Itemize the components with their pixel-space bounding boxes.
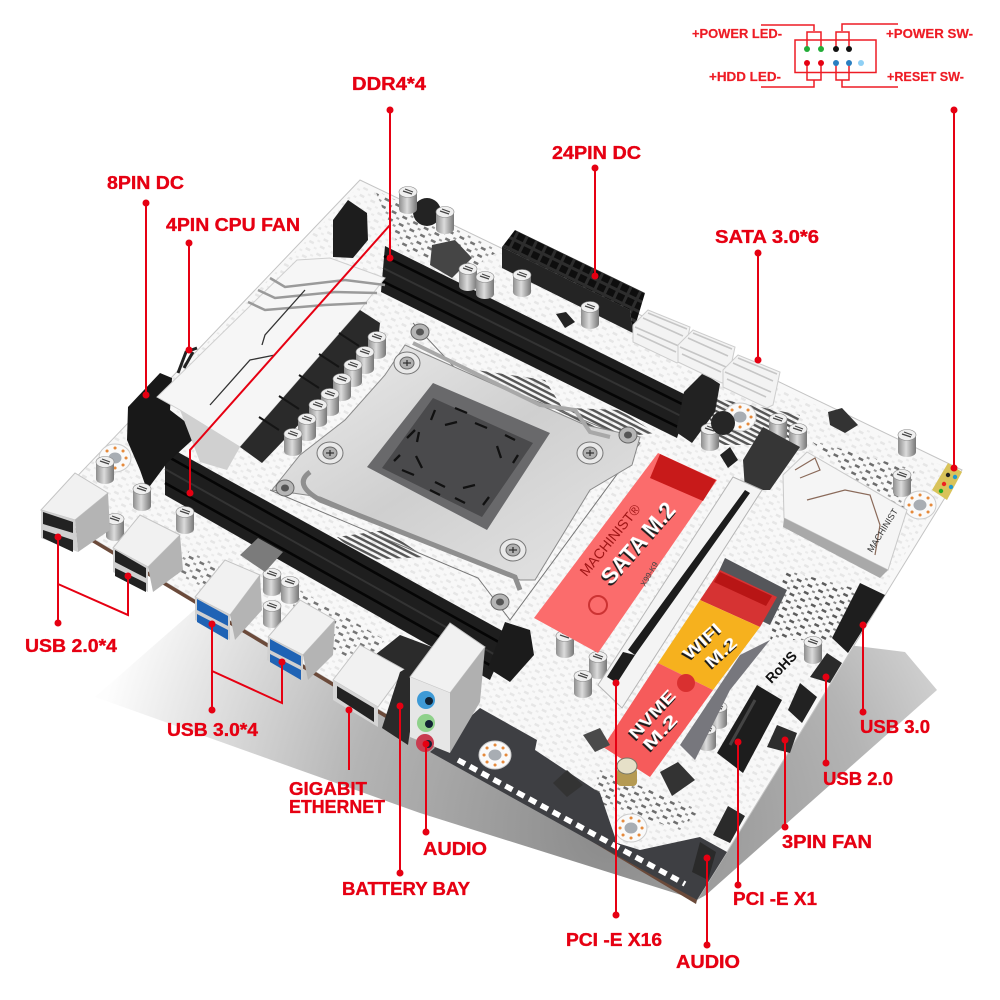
trace graphics centre right [543,407,655,440]
label: 3PIN FAN: 3PIN FAN [782,832,872,852]
label: USB 3.0*4: USB 3.0*4 [167,720,258,740]
retention lever bottom [303,472,520,590]
PCB [45,180,962,900]
MACHINIST heatsink logo: MACHINIST [865,506,900,554]
component cluster bottom [590,770,700,830]
SATA ports [633,310,780,408]
bottom audio header [692,842,716,880]
power switch label: +POWER SW- [886,27,973,41]
MOSFET block top [430,240,472,278]
leader: SATA [754,250,762,364]
socket post right [619,427,637,443]
mount hole upper [724,403,756,431]
audio jack block [410,623,485,753]
leader: front audio [704,854,710,948]
mount hole left [99,444,131,472]
NVME M.2 caption: M.2 [639,711,682,754]
component cluster lower right [770,570,860,640]
PCI-E X1 slot [717,685,782,773]
socket post bottom [491,594,509,610]
label: battery bay: BATTERY BAY [342,879,470,899]
WIFI M.2 caption: M.2 [702,633,741,671]
PCB bottom thickness edge [45,510,697,904]
fan header [788,683,817,723]
VRM chokes [240,310,380,463]
USB 2.0 stack right [113,515,183,592]
slate patch around PCI-E X1 [680,640,770,760]
motherboard [41,180,962,904]
label: gigabit ethernet: ETHERNET [289,797,385,817]
top-left black power connector [333,200,368,258]
socket post left [276,480,294,496]
RoHS mark: RoHS [762,648,800,686]
USB 3.0 header [832,583,885,653]
3 pin fan header [767,725,797,753]
leader: 8 pin [142,200,150,398]
leader: DDR4 [186,106,394,496]
label: 8PIN DC: 8PIN DC [107,173,184,193]
front panel pin header [932,463,962,500]
M.2 slot gray housing [708,558,787,625]
trace graphics lower [337,530,425,560]
leader: rear audio [422,740,430,836]
USB 2.0 header [810,653,842,683]
dark bottom PCB strip [430,708,727,900]
right chipset heatsink [783,452,907,578]
board drop shadow [95,570,937,900]
socket screw bottom [500,539,526,561]
leader: USB 3.0 x4 [208,620,286,714]
power LED label: +POWER LED- [692,27,782,41]
label: 24PIN DC: 24PIN DC [552,143,641,163]
USB 2.0 stack left [41,473,110,552]
label: USB 3.0: USB 3.0 [860,717,930,737]
DIMM slots lower [165,445,534,682]
WIFI M.2 caption [679,619,741,671]
label: SATA: SATA 3.0*6 [715,227,819,247]
leader: ethernet [346,706,352,770]
SATA M.2 caption: SATA M.2 [595,497,681,589]
PCI-E X16 slot [598,477,762,708]
HDD LED label: +HDD LED- [709,70,781,84]
component cluster left [170,550,260,610]
trace graphics right of slots [700,395,800,445]
capacitors [96,186,916,751]
label: front audio: AUDIO [676,952,740,972]
mount hole bottom [615,814,647,842]
CPU socket [270,323,640,620]
NVME M.2 caption [625,686,682,754]
inductor top [413,198,441,226]
trace graphics centre left [476,370,570,420]
screw mark [589,596,607,614]
front panel pin diagram [692,24,973,87]
8 pin connector [127,373,200,490]
DIMM slots upper [381,246,720,443]
SATA M.2 highlight [534,453,717,653]
socket posts [411,324,429,340]
socket screw left [317,442,343,464]
leader: battery [396,702,404,876]
small chip by 24 pin [556,312,575,328]
label: PCI-E X16: PCI -E X16 [566,930,662,950]
component cluster upper right [810,440,915,520]
small chip right [720,447,738,468]
component cluster top [375,190,500,270]
chip right top [828,408,858,433]
label: gigabit ethernet [289,779,385,817]
brass standoff [617,758,637,786]
board model text: X99-K9 [639,560,660,588]
label: 4PIN CPU FAN: 4PIN CPU FAN [166,215,300,235]
leader: PCI-E x1 [734,738,742,888]
ethernet port [333,645,405,727]
mount hole bottom left [479,741,511,769]
label: rear audio: AUDIO [423,839,487,859]
leader: USB 2.0 x4 [54,534,132,626]
NVME and WIFI M.2 highlights [603,570,777,777]
black connector right [743,427,800,490]
leader: pin header [950,106,958,472]
CPU lid [382,398,533,517]
reset switch label: +RESET SW- [887,70,964,84]
leader: 24 pin [592,164,598,280]
M.2 red standoff [677,674,695,692]
label: USB 2.0: USB 2.0 [823,769,893,789]
square chips [660,762,695,796]
socket screw right [577,442,603,464]
bottom pin header [713,806,745,843]
inductor right [711,411,735,435]
scattered surface components [45,185,955,895]
leader: USB 3.0 [860,622,866,716]
battery bay [382,660,420,745]
socket screws [394,352,420,374]
leader: 3 pin fan [782,736,788,830]
label: gigabit ethernet: GIGABIT [289,779,367,799]
label: PCI-E X1: PCI -E X1 [733,889,817,909]
retention lever top [413,343,610,437]
mount hole right [904,491,936,519]
leader: 4 pin fan [186,240,192,354]
component cluster USB3 [285,590,385,665]
label: USB 2.0*4: USB 2.0*4 [25,636,117,656]
24 pin connector [502,230,645,333]
label: DDR4: DDR4*4 [352,74,426,94]
WIFI M.2 caption: WIFI [679,619,725,663]
VRM heatsink [157,258,385,470]
USB 3.0 stack right [267,600,335,680]
leader: USB 2.0 [822,674,830,766]
USB 3.0 stack left [195,560,262,640]
4 pin CPU fan header [178,348,197,373]
NVME M.2 caption: NVME [625,686,680,743]
leader: PCI-E x16 [612,680,620,918]
MACHINIST brand: MACHINIST® [576,501,644,579]
